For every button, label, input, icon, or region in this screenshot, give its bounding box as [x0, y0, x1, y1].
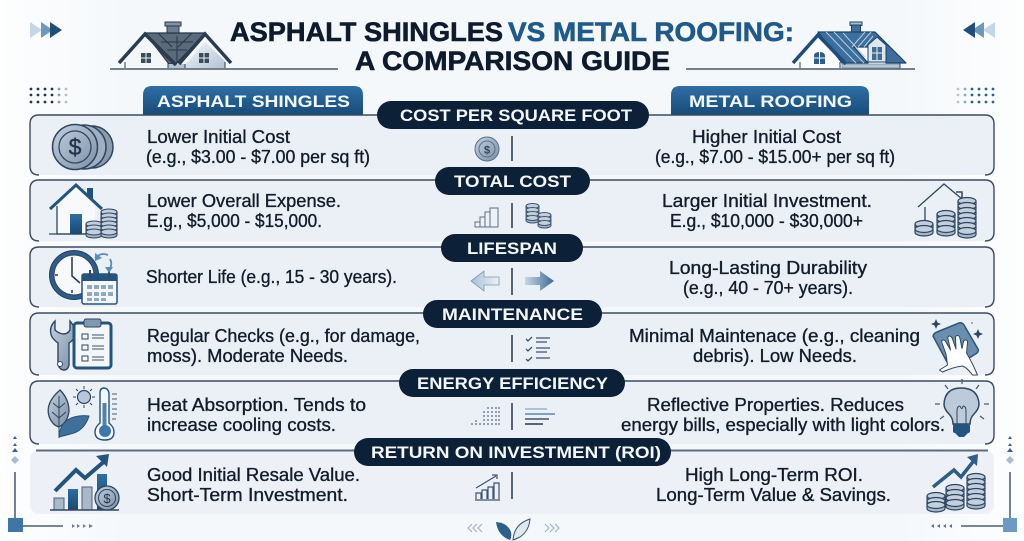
decoration: top right dots — [957, 88, 994, 103]
text: metal energy: Reflective Properties. Reduces — [647, 395, 904, 415]
text: metal energy — [621, 395, 945, 435]
panel: return on investment — [30, 450, 994, 514]
text: asphalt cost: Lower Initial Cost — [147, 127, 290, 147]
pill: cost per square foot: COST PER SQUARE FOOT — [400, 106, 633, 125]
decoration: top left dots — [30, 88, 67, 103]
text: metal total cost: E.g., $10,000 - $30,000+ — [670, 211, 863, 231]
pill: maintenance — [423, 300, 602, 328]
icon: house and coins — [49, 185, 117, 238]
pill: lifespan — [441, 234, 583, 262]
icon: house outline and coin stacks — [915, 184, 976, 238]
pill: energy efficiency: ENERGY EFFICIENCY — [417, 374, 609, 393]
text: metal roi — [656, 465, 891, 505]
divider — [511, 335, 513, 362]
icon: cloth and hand — [931, 319, 983, 375]
panel: lifespan — [30, 247, 994, 307]
text: metal total cost — [662, 191, 872, 231]
panel: cost per square foot — [30, 115, 994, 175]
pill: total cost: TOTAL COST — [454, 172, 572, 191]
pill: maintenance: MAINTENANCE — [442, 305, 583, 324]
text: metal roi: Long-Term Value & Savings. — [656, 485, 891, 505]
text: asphalt roi: Good Initial Resale Value. — [147, 465, 360, 485]
icon: right arrow — [525, 271, 554, 291]
text: asphalt energy: Heat Absorption. Tends to — [147, 395, 366, 415]
text: asphalt lifespan: Shorter Life (e.g., 15 - 30 years). — [146, 267, 397, 287]
icon: bars, arrow, coin — [50, 454, 119, 510]
text: asphalt roi: Short-Term Investment. — [147, 485, 348, 505]
icon: center growth bars — [475, 475, 500, 500]
text: asphalt energy — [147, 395, 366, 435]
text: metal total cost: Larger Initial Investment. — [662, 191, 872, 211]
text: asphalt maintenance: Regular Checks (e.g., for damage, — [147, 326, 420, 346]
icon: metal house — [686, 22, 915, 69]
title: A COMPARISON GUIDE — [355, 46, 670, 76]
text: asphalt energy: increase cooling costs. — [147, 415, 336, 435]
text: metal cost: Higher Initial Cost — [692, 127, 841, 147]
text: metal lifespan — [669, 258, 867, 298]
icon: asphalt house — [110, 22, 338, 69]
title — [230, 17, 794, 76]
icon: center lines — [525, 409, 555, 424]
text: asphalt roi — [147, 465, 360, 505]
text: asphalt maintenance — [147, 326, 420, 366]
text: asphalt total cost: E.g., $5,000 - $15,000. — [147, 211, 322, 231]
panel: total cost — [30, 180, 994, 241]
title: ASPHALT SHINGLES — [230, 17, 503, 47]
text: metal maintenance: debris). Low Needs. — [693, 346, 857, 366]
icon: bars, arrow, coin: $ — [103, 491, 111, 506]
decoration: bottom right corner — [931, 436, 1017, 532]
pill: cost per square foot — [377, 101, 649, 129]
divider — [511, 268, 513, 295]
icon: left arrow — [471, 271, 499, 291]
panel: energy efficiency — [30, 379, 994, 444]
tab: asphalt shingles — [143, 86, 363, 116]
pill: energy efficiency — [399, 369, 625, 397]
pill: lifespan: LIFESPAN — [467, 239, 557, 258]
icon: coins: $ — [69, 134, 82, 160]
icon: checklist — [526, 337, 550, 361]
icon: coin stacks and arrow — [927, 454, 985, 512]
icon: light bulb — [935, 379, 989, 437]
tab: asphalt shingles: ASPHALT SHINGLES — [157, 92, 350, 111]
decoration: top right arrows — [963, 22, 995, 38]
text: asphalt total cost — [147, 191, 341, 231]
text: metal lifespan: (e.g., 40 - 70+ years). — [683, 278, 853, 298]
icon: center dots — [471, 407, 500, 425]
icon: center coin — [475, 137, 499, 161]
divider — [511, 472, 513, 499]
pill: total cost — [435, 167, 590, 195]
decoration: bottom sprout — [468, 519, 559, 540]
text: asphalt total cost: Lower Overall Expense. — [147, 191, 341, 211]
icon: center coins — [526, 204, 551, 228]
tab: metal roofing: METAL ROOFING — [689, 92, 852, 111]
text: metal cost — [655, 127, 895, 167]
pill: return on investment — [354, 438, 671, 466]
icon: wrench and clipboard — [51, 319, 111, 370]
divider — [511, 403, 513, 430]
divider — [511, 203, 513, 228]
text: asphalt cost: (e.g., $3.00 - $7.00 per sq ft) — [146, 147, 370, 167]
text: asphalt maintenance: moss). Moderate Needs. — [147, 346, 348, 366]
text: metal maintenance: Minimal Maintenace (e.g., cleaning — [629, 326, 920, 346]
tab: metal roofing — [671, 86, 869, 116]
text: metal maintenance — [629, 326, 920, 366]
icon: center coin: $ — [484, 144, 490, 156]
text: metal roi: High Long-Term ROI. — [685, 465, 863, 485]
panel: maintenance — [30, 313, 994, 375]
text: metal cost: (e.g., $7.00 - $15.00+ per sq ft) — [655, 147, 895, 167]
icon: coins — [52, 124, 113, 170]
text: metal lifespan: Long-Lasting Durability — [669, 258, 867, 278]
icon: center bars — [475, 208, 498, 227]
title: VS METAL ROOFING: — [508, 17, 794, 47]
text: metal energy: energy bills, especially with light colors. — [621, 415, 945, 435]
pill: return on investment: RETURN ON INVESTMENT (ROI) — [371, 443, 661, 462]
decoration: top left arrows — [30, 22, 62, 38]
decoration: bottom left corner — [8, 436, 93, 532]
icon: leaves, sun, thermometer — [48, 386, 117, 440]
text: asphalt cost — [146, 127, 370, 167]
divider — [511, 136, 513, 161]
icon: clock and calendar — [50, 250, 117, 304]
